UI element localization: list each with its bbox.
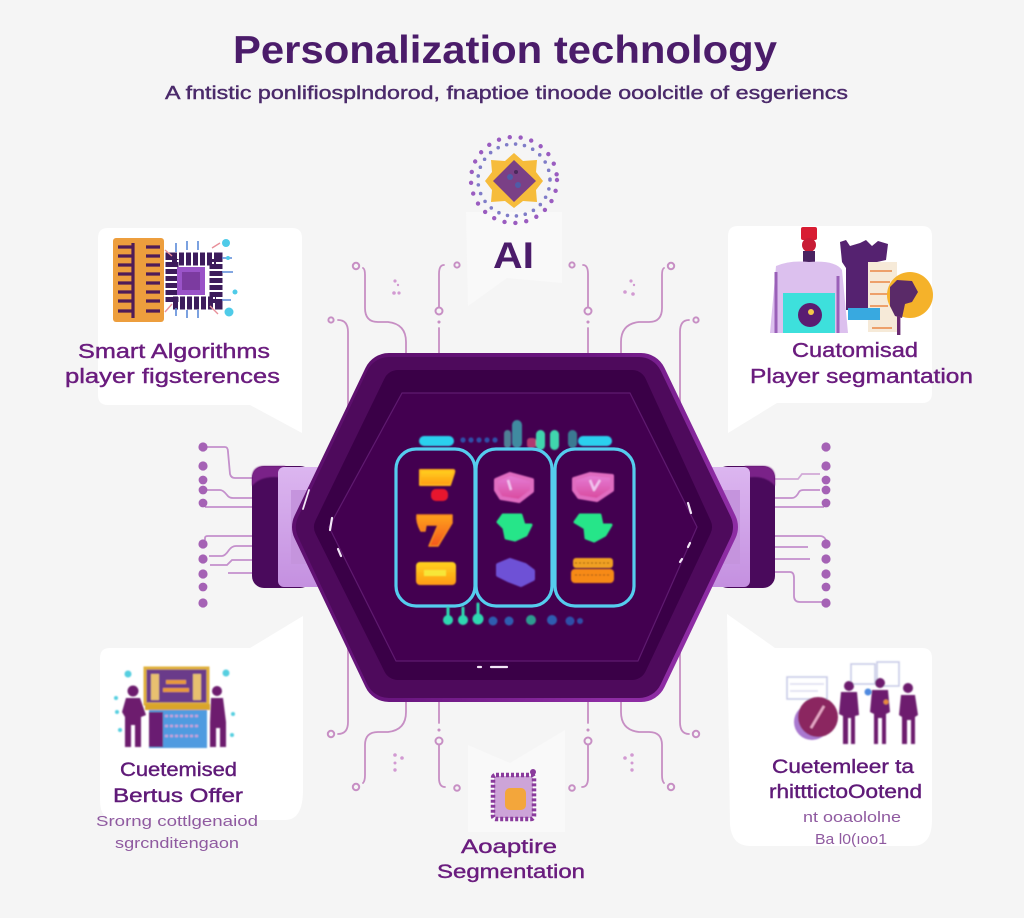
slot symbols: reel 3 [571, 474, 614, 583]
panel: AI backdrop [466, 212, 562, 306]
customised bonus offer text [96, 760, 258, 852]
bonus description [96, 813, 258, 852]
panel: customer card [727, 614, 932, 846]
circuit traces: top [328, 262, 699, 420]
bonus heading: Cuetemised [120, 760, 237, 781]
slot symbols: reel 2 [496, 474, 533, 585]
icon: bonus offer machine [114, 668, 235, 748]
icon: segmentation flask [770, 227, 933, 335]
left connector traces and dots [198, 442, 254, 608]
customer description: Ba l0(ıoo1 [815, 832, 887, 848]
panel: customised player segmentation card [728, 226, 932, 433]
customer description: nt ooaololne [803, 810, 901, 826]
adaptive segmentation text: Aoaptire [461, 837, 557, 858]
adaptive segmentation text [437, 837, 585, 883]
panel: adaptive segmentation backdrop [468, 730, 565, 832]
slot machine reels [396, 449, 634, 606]
hexagon display panel [329, 393, 697, 661]
customised player segmentation text [750, 340, 973, 388]
panel: customised bonus offer card [100, 616, 303, 820]
smart algorithms text: player figsterences [65, 366, 280, 388]
glint marks [303, 490, 691, 667]
bonus description: Srorng cottlgenaiod [96, 813, 258, 830]
bonus description: sgrcnditengaon [115, 835, 239, 852]
smart algorithms text: Smart Algorithms [78, 341, 270, 363]
circuit speckles [392, 279, 635, 772]
icon: customer group [787, 662, 918, 744]
customer heading: Cuetemleer ta [772, 757, 915, 778]
subtitle: A fntistic ponlifiosplndorod, fnaptioe tinoode ooolcitle of esgeriencs [165, 83, 848, 103]
hexagon rim [318, 379, 712, 676]
AI label: AI [493, 235, 534, 276]
hexagon body [320, 381, 709, 674]
panel: smart algorithms card [98, 228, 302, 433]
customised player segmentation text: Cuatomisad [792, 340, 918, 362]
adaptive segmentation text: Segmentation [437, 862, 585, 883]
smart algorithms text [65, 341, 280, 388]
right connector traces and dots [773, 442, 831, 608]
slot symbols: reel 1 [416, 470, 456, 585]
icon: adaptive segmentation chip [493, 769, 536, 819]
title: Personalization technology [233, 29, 777, 72]
right strap [690, 466, 775, 588]
customer text [769, 757, 922, 848]
circuit traces: bottom [328, 640, 699, 791]
left strap [252, 466, 338, 588]
bonus heading: Bertus Offer [113, 786, 244, 807]
icon: AI chip burst [471, 137, 557, 223]
bonus heading [113, 760, 244, 807]
customer heading: rhitttictoOotend [769, 782, 922, 803]
customer description [803, 810, 901, 848]
customised player segmentation text: Player segmantation [750, 366, 973, 388]
central hexagon device [303, 379, 712, 676]
customer heading [769, 757, 922, 803]
slot machine top wiring [419, 420, 612, 450]
hexagon inner ring [329, 385, 697, 665]
slot machine bottom wiring [443, 604, 583, 626]
icon: algorithm chip [113, 238, 238, 322]
